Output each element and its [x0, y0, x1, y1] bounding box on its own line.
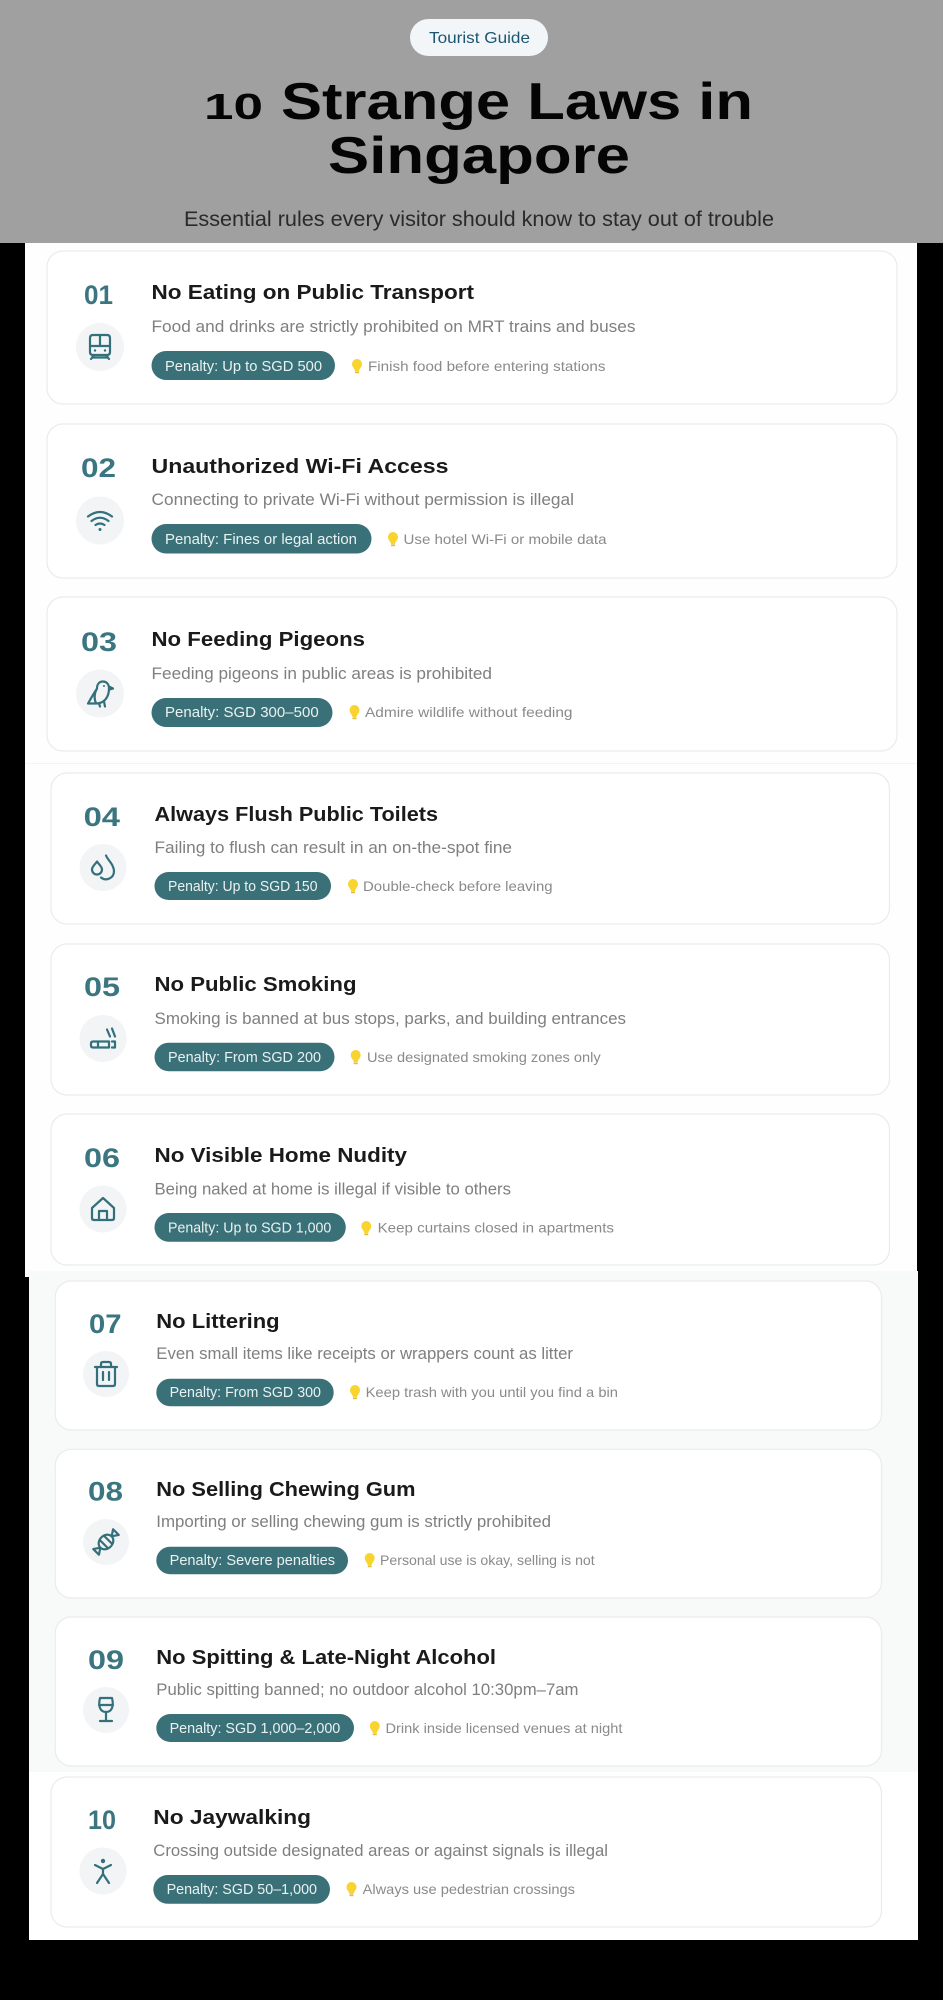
card 01: No Eating on Public Transport [47, 251, 897, 404]
card 04: Always Flush Public Toilets: Always Flush Public Toilets [154, 804, 438, 826]
card 03: No Feeding Pigeons: No Feeding Pigeons [152, 629, 365, 651]
card 10: No Jaywalking [51, 1777, 882, 1927]
card 07: No Littering: 07 [89, 1309, 122, 1339]
card 09: No Spitting & Late-Night Alcohol [55, 1617, 882, 1766]
card 07: No Littering: Even small items like receipts or wrappers count as litter [156, 1345, 574, 1363]
card 02: Unauthorized Wi-Fi Access: 02 [81, 453, 116, 483]
card 08: No Selling Chewing Gum: Penalty: Severe penalties [170, 1553, 335, 1569]
card 10: No Jaywalking: Crossing outside designated areas or against signals is illegal [153, 1842, 608, 1860]
card 03: No Feeding Pigeons: Penalty: SGD 300–500 [165, 705, 319, 721]
card 07: No Littering: Keep trash with you until you find a bin [366, 1384, 618, 1400]
card 08: No Selling Chewing Gum [55, 1449, 882, 1598]
icon: wifi [76, 496, 124, 544]
card 06: No Visible Home Nudity: Keep curtains closed in apartments [378, 1220, 614, 1236]
card 03: No Feeding Pigeons: Admire wildlife without feeding [365, 704, 572, 720]
icon: water drops [80, 844, 126, 891]
card 01: No Eating on Public Transport: 01 [84, 280, 113, 310]
card 10: No Jaywalking: Always use pedestrian crossings [363, 1881, 575, 1897]
card 04: Always Flush Public Toilets: Failing to flush can result in an on-the-spot fine [154, 839, 512, 857]
card 10: No Jaywalking: 10 [88, 1805, 116, 1835]
header band [0, 0, 943, 243]
card 02: Unauthorized Wi-Fi Access: Penalty: Fines or legal action [165, 532, 357, 548]
card 05: No Public Smoking: Smoking is banned at bus stops, parks, and building entrances [154, 1010, 626, 1028]
subtitle: Essential rules every visitor should know to stay out of trouble [184, 208, 774, 231]
card 08: No Selling Chewing Gum: Importing or selling chewing gum is strictly prohibited [156, 1513, 551, 1531]
card 04: Always Flush Public Toilets: 04 [84, 802, 120, 832]
card 07: No Littering: Penalty: From SGD 300 [170, 1385, 321, 1401]
icon: bird [76, 670, 124, 718]
card 01: No Eating on Public Transport: No Eating on Public Transport [152, 282, 474, 304]
card 10: No Jaywalking: No Jaywalking [153, 1807, 311, 1829]
card 01: No Eating on Public Transport: Food and drinks are strictly prohibited on MRT trains and buses [152, 318, 636, 336]
card 09: No Spitting & Late-Night Alcohol: Drink inside licensed venues at night [386, 1720, 623, 1736]
title: Strange Laws in [281, 73, 753, 131]
white panel: upper section [25, 243, 917, 1277]
card 07: No Littering [55, 1281, 882, 1430]
title [204, 73, 753, 185]
card 02: Unauthorized Wi-Fi Access: Unauthorized Wi-Fi Access [152, 456, 448, 478]
card 06: No Visible Home Nudity: Penalty: Up to SGD 1,000 [168, 1221, 331, 1237]
card 08: No Selling Chewing Gum: No Selling Chewing Gum [156, 1479, 416, 1501]
card 09: No Spitting & Late-Night Alcohol: Penalty: SGD 1,000–2,000 [170, 1721, 340, 1737]
card 05: No Public Smoking [51, 944, 890, 1095]
icon: home [80, 1186, 126, 1232]
white panel: final section [29, 1772, 918, 1940]
card 08: No Selling Chewing Gum: Personal use is okay, selling is not [380, 1552, 595, 1568]
card 06: No Visible Home Nudity: 06 [84, 1143, 120, 1173]
card 06: No Visible Home Nudity: No Visible Home Nudity [154, 1145, 408, 1167]
card 02: Unauthorized Wi-Fi Access: Connecting to private Wi-Fi without permission is illegal [152, 491, 574, 509]
icon: train [76, 323, 124, 371]
icon: candy [83, 1519, 129, 1565]
card 03: No Feeding Pigeons [47, 597, 897, 751]
card 06: No Visible Home Nudity [51, 1114, 890, 1265]
card 09: No Spitting & Late-Night Alcohol: Public spitting banned; no outdoor alcohol 10:30pm–7am [156, 1681, 579, 1699]
icon: wine glass [83, 1687, 129, 1733]
card 02: Unauthorized Wi-Fi Access: Use hotel Wi-Fi or mobile data [404, 531, 607, 547]
title: 10 [204, 86, 263, 127]
card 01: No Eating on Public Transport: Finish food before entering stations [368, 358, 606, 374]
icon: pedestrian [80, 1848, 126, 1894]
card 04: Always Flush Public Toilets [51, 773, 890, 924]
card 02: Unauthorized Wi-Fi Access [47, 424, 897, 578]
title: Singapore [328, 127, 630, 185]
card 04: Always Flush Public Toilets: Penalty: Up to SGD 150 [168, 879, 318, 895]
card 03: No Feeding Pigeons: 03 [81, 627, 117, 657]
card 05: No Public Smoking: No Public Smoking [154, 974, 356, 996]
card 08: No Selling Chewing Gum: 08 [88, 1477, 123, 1507]
icon: cigarette [80, 1015, 126, 1062]
tag pill: Tourist Guide [410, 19, 548, 56]
card 05: No Public Smoking: Penalty: From SGD 200 [168, 1050, 321, 1066]
card 04: Always Flush Public Toilets: Double-check before leaving [363, 878, 553, 894]
card 09: No Spitting & Late-Night Alcohol: No Spitting & Late-Night Alcohol [156, 1647, 496, 1669]
off-white panel: lower section [29, 1271, 918, 1772]
card 05: No Public Smoking: Use designated smoking zones only [367, 1049, 601, 1065]
tag pill: Tourist Guide: Tourist Guide [429, 30, 530, 47]
card 03: No Feeding Pigeons: Feeding pigeons in public areas is prohibited [152, 665, 492, 683]
card 09: No Spitting & Late-Night Alcohol: 09 [88, 1645, 124, 1675]
card 10: No Jaywalking: Penalty: SGD 50–1,000 [167, 1882, 317, 1898]
card 07: No Littering: No Littering [156, 1311, 280, 1333]
card 05: No Public Smoking: 05 [84, 972, 120, 1002]
card 06: No Visible Home Nudity: Being naked at home is illegal if visible to others [154, 1181, 511, 1199]
icon: trash bin [83, 1351, 129, 1397]
card 01: No Eating on Public Transport: Penalty: Up to SGD 500 [165, 359, 322, 375]
